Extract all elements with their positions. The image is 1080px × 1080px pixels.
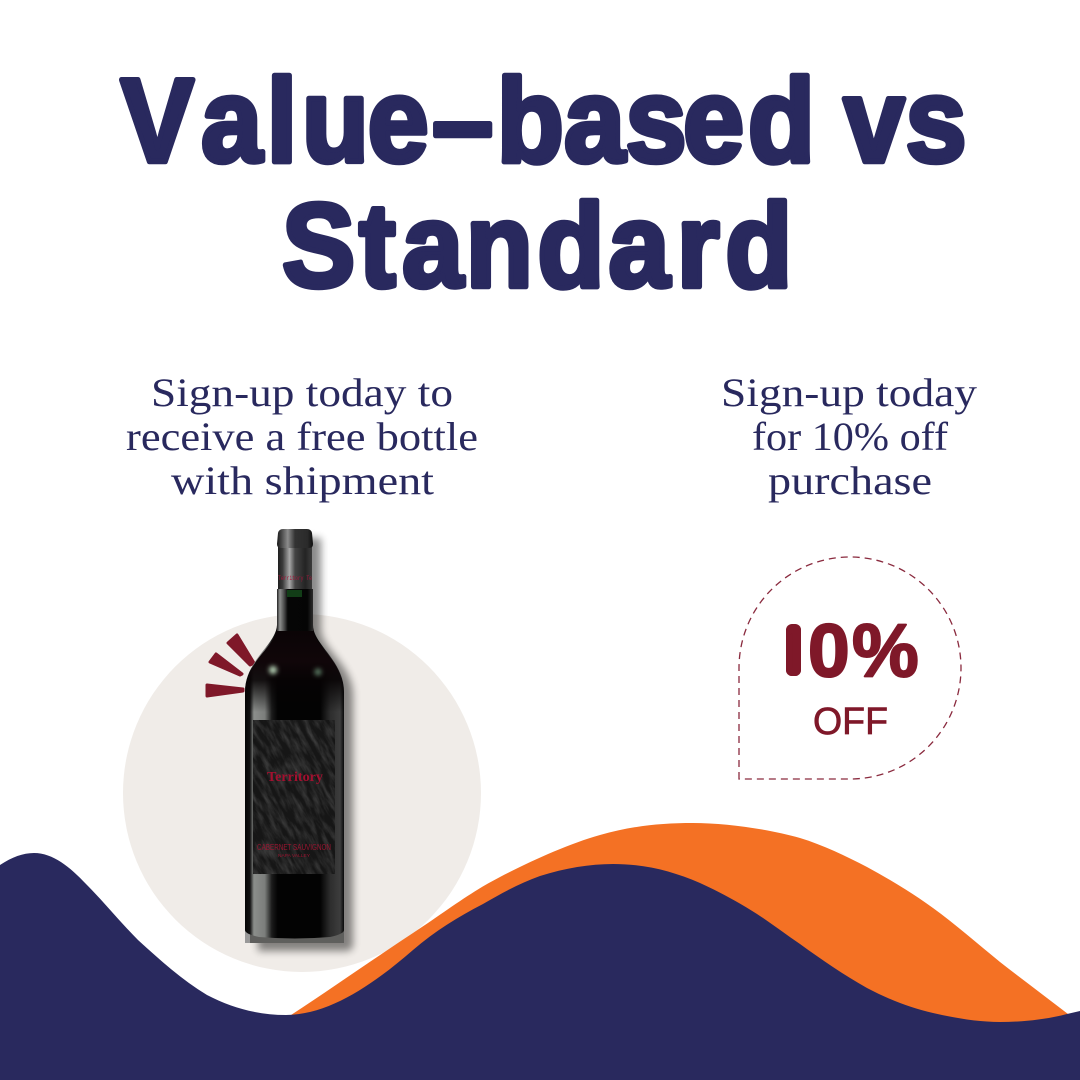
bottle shadow <box>258 538 353 951</box>
title: Value–based vs <box>121 55 967 188</box>
orange wave <box>291 823 1068 1040</box>
label region: NAPA VALLEY <box>278 853 310 858</box>
text: discount offer: purchase <box>768 458 932 503</box>
text: free bottle offer <box>126 370 478 503</box>
badge: 10% <box>786 622 918 678</box>
bottle neck <box>277 589 313 631</box>
badge: 10%: 0% <box>808 608 919 692</box>
base corner <box>245 925 250 943</box>
label name: Territory <box>267 769 323 784</box>
text: discount offer: for 10% off <box>752 414 949 459</box>
capsule lip <box>277 529 313 548</box>
navy wave <box>0 853 1080 1080</box>
wine label <box>253 720 335 874</box>
text: free bottle offer: Sign-up today to <box>151 370 453 415</box>
shoulder highlights <box>269 666 322 676</box>
text: free bottle offer: with shipment <box>171 458 434 503</box>
bottle shoulder <box>245 628 344 712</box>
capsule text: Territory Te <box>278 575 312 582</box>
label texture <box>253 720 335 874</box>
text: free bottle offer: receive a free bottle <box>126 414 478 459</box>
label varietal: CABERNET SAUVIGNON <box>257 843 331 852</box>
beige circle <box>123 614 481 972</box>
text: discount offer <box>721 370 977 503</box>
badge: 10%: 1 <box>775 608 817 692</box>
capsule <box>278 546 312 589</box>
title: Standard <box>282 180 792 312</box>
title <box>121 55 967 312</box>
icon: burst marks <box>207 635 254 696</box>
green foil window <box>287 590 302 597</box>
bottle body <box>245 589 344 938</box>
text: discount offer: Sign-up today <box>721 370 977 415</box>
wine bottle <box>245 529 358 956</box>
bottle base <box>245 925 344 943</box>
badge: OFF: OFF <box>813 701 888 743</box>
dashed badge outline <box>739 557 961 779</box>
